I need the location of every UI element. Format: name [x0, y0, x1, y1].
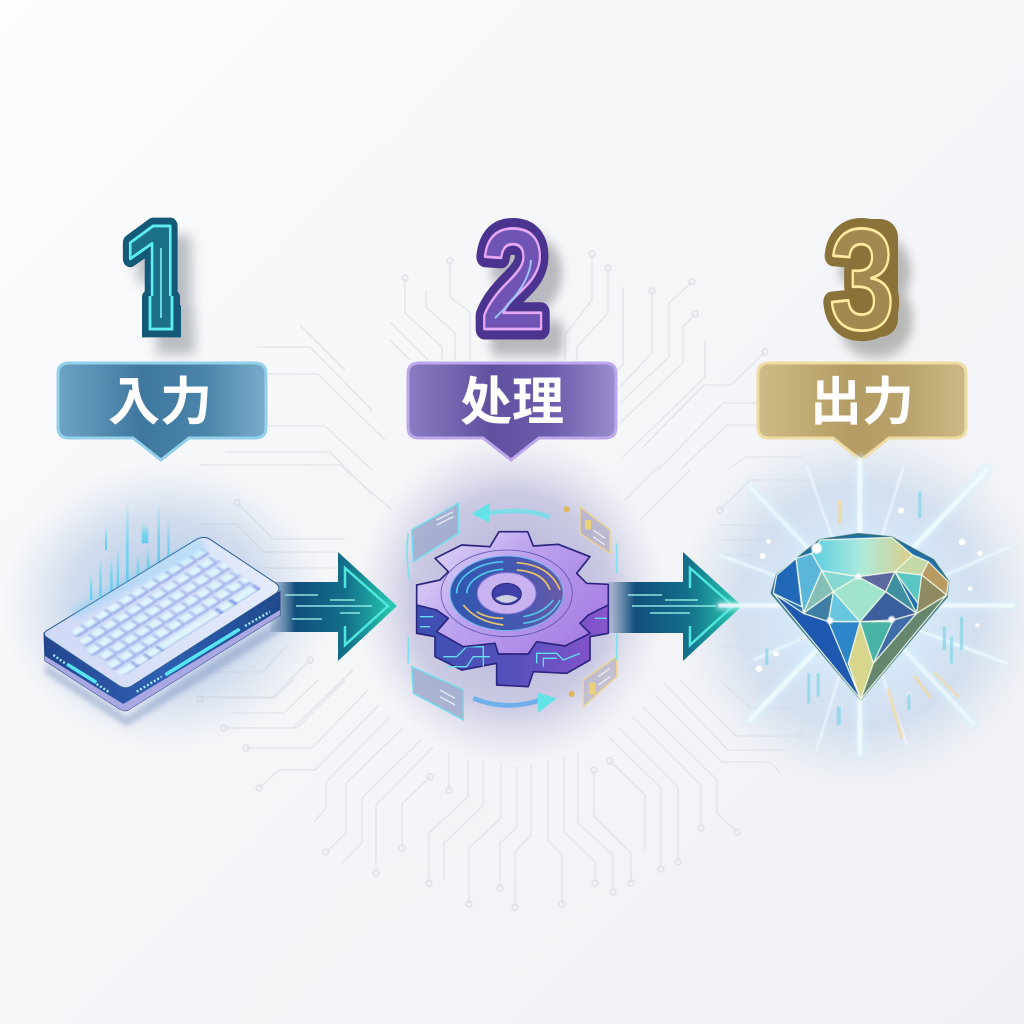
number 3: 3	[829, 199, 895, 360]
keys	[66, 550, 258, 675]
keyboard top face	[44, 537, 279, 688]
number 1: 1	[135, 210, 209, 378]
gear hub	[477, 573, 536, 614]
diamond glow	[675, 422, 1024, 792]
warm streaks	[840, 502, 958, 737]
icon: gear with orbiting panels	[407, 503, 617, 720]
arrow: process to output	[608, 552, 742, 661]
label: 入力: 入力	[108, 374, 212, 432]
keyboard body sides	[44, 592, 280, 711]
data panels	[407, 503, 617, 720]
number 2: 2	[480, 199, 546, 360]
number 3: 3	[843, 216, 909, 377]
keyboard lower trim	[45, 610, 280, 711]
number 1: 1	[121, 193, 195, 361]
label: 处理	[408, 363, 616, 460]
gear side circuits	[420, 617, 607, 667]
key glow	[73, 543, 203, 613]
number 2: 2	[480, 199, 546, 360]
circular arrows	[472, 503, 557, 713]
data specks	[765, 492, 963, 725]
label: 处理: 处理	[460, 374, 564, 432]
label: 入力	[58, 363, 266, 460]
soft ray halos	[720, 460, 1013, 753]
icon: keyboard	[44, 500, 283, 727]
gear hole	[492, 583, 521, 605]
gear sides	[417, 605, 608, 687]
gold dots	[564, 506, 575, 697]
label: 出力: 出力	[810, 374, 914, 432]
icon: diamond with light rays	[720, 460, 1013, 753]
gear ring	[441, 550, 572, 637]
label: 出力	[758, 363, 966, 460]
data bars behind keyboard	[90, 500, 170, 600]
diamond facets	[773, 537, 948, 699]
light bars	[53, 612, 270, 693]
keyboard shadow	[45, 617, 283, 727]
diamond outline base	[772, 534, 948, 699]
gear top face	[417, 532, 608, 654]
number 3: 3	[829, 199, 895, 360]
gear circuit traces	[457, 562, 560, 625]
gear glow	[356, 435, 666, 765]
light rays	[720, 460, 1013, 753]
sparkles	[756, 508, 983, 697]
arrow: input to process	[270, 552, 397, 661]
gear circuit disc	[450, 556, 563, 631]
number 2: 2	[494, 216, 560, 377]
keyboard glow	[0, 460, 330, 750]
diamond highlights	[811, 543, 895, 624]
circuit board line pattern	[197, 251, 810, 910]
number 1: 1	[121, 193, 195, 361]
